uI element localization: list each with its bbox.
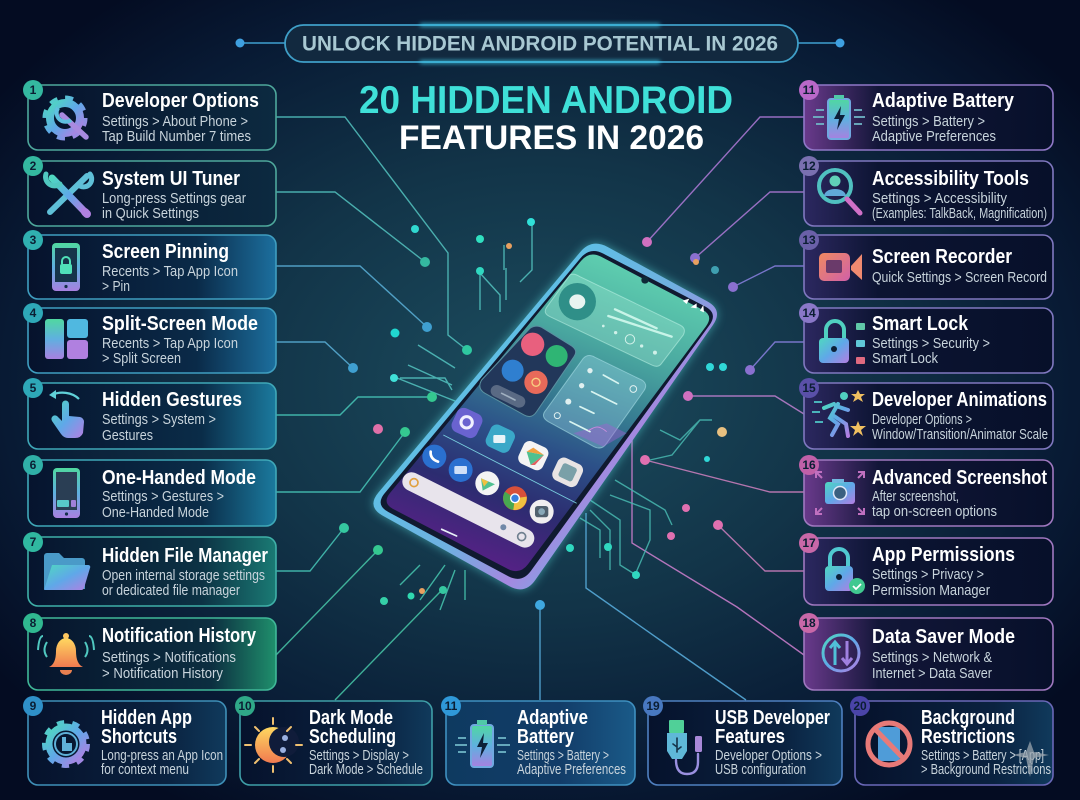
path text [309,748,423,778]
heading [101,707,192,748]
badge 5: 5 [30,381,37,395]
panel: card 6 One-Handed Mode [23,455,276,526]
icon: crossed wrenches [46,174,92,214]
path text: in Quick Settings [102,206,199,222]
path text [715,748,822,778]
path text: Developer Options > [872,412,972,428]
panel: card 15 Developer Animations [799,378,1053,449]
panel: card 18 Data Saver Mode [799,613,1053,690]
path text [102,412,216,444]
heading: Background [921,707,1015,729]
panel: card 11 Adaptive Battery right [799,80,1053,150]
icon: padlocks [819,321,865,364]
heading: USB Developer [715,707,830,729]
panel: card 10 Dark Mode Scheduling [235,696,432,785]
sparkle watermark [1013,741,1049,777]
icon: gear with hand [45,723,87,765]
path text: Internet > Data Saver [872,666,992,682]
badge 1 [23,80,43,100]
path text: > Notification History [102,666,224,682]
path text: One-Handed Mode [102,505,209,521]
badge 7: 7 [30,535,37,549]
badge 2: 2 [30,159,37,173]
badge 13: 13 [802,233,816,247]
badge 6 [23,455,43,475]
panel: card 14 Smart Lock [799,303,1053,373]
circuit lines right and bottom [400,117,804,700]
heading [309,707,396,748]
icon: up down arrows in circle [823,635,859,671]
widget: app folder [480,326,576,417]
path text [102,336,238,367]
heading: Hidden App [101,707,192,729]
badge 19: 19 [646,699,660,713]
badge 1: 1 [30,83,37,97]
panel: card 12 Accessibility Tools [799,156,1053,226]
path text [102,568,265,599]
widget: media player [545,274,684,366]
icon: sun and moon [245,718,302,772]
heading: Advanced Screenshot [872,467,1047,489]
path text: After screenshot, [872,489,959,505]
path text: Settings > About Phone > [102,114,248,130]
icon: battery [813,95,865,139]
badge 5 [23,378,43,398]
path text: tap on-screen options [872,504,997,520]
badge 20 [850,696,870,716]
badge 15: 15 [802,381,816,395]
panel: card 9 Hidden App Shortcuts [23,696,226,785]
path text: Settings > Notifications [102,650,236,666]
panel: card 7 Hidden File Manager [23,532,276,606]
icon: bell [38,633,94,675]
icon: prohibited phone [868,723,910,765]
badge 6: 6 [30,458,37,472]
path text: Settings > Security > [872,336,990,352]
panel: card 2 System UI Tuner [23,156,276,226]
widget: settings sliders [543,356,646,448]
heading: Adaptive Battery [872,90,1015,112]
panel: card 20 Background Restrictions [850,696,1053,785]
badge 8 [23,613,43,633]
heading: Battery [517,726,575,748]
path text [102,489,224,521]
title: 20 HIDDEN ANDROID [359,79,733,122]
banner [236,25,844,62]
badge 13 [799,230,819,250]
path text: Tap Build Number 7 times [102,129,251,145]
path text: Long-press Settings gear [102,191,246,207]
heading: Data Saver Mode [872,626,1015,648]
path text [102,191,246,222]
badge 2 [23,156,43,176]
path text: Open internal storage settings [102,568,265,584]
heading [715,707,830,748]
badge 14 [799,303,819,323]
circuit lines left [276,117,532,700]
icon: folder [44,553,90,590]
path text: Settings > Accessibility [872,191,1008,207]
heading: Developer Options [102,90,259,112]
path text: Dark Mode > Schedule [309,762,423,778]
panel: card 16 Advanced Screenshot [799,455,1053,526]
panel: card 13 Screen Recorder [799,230,1053,299]
icon: magnifier with person [819,170,860,213]
path text: Settings > Battery > [517,748,609,764]
heading: Scheduling [309,726,396,748]
heading: One-Handed Mode [102,467,256,489]
path text: Adaptive Preferences [872,129,996,145]
path text [872,489,997,520]
path text: for context menu [101,762,189,778]
path text [872,650,992,682]
path text: Recents > Tap App Icon [102,336,238,352]
badge 18 [799,613,819,633]
path text [872,412,1048,443]
path text: Settings > System > [102,412,216,428]
badge 18: 18 [802,616,816,630]
icon: runner and stars [812,390,866,436]
heading: Screen Pinning [102,241,229,263]
badge 17: 17 [802,536,816,550]
icon: video camera [819,253,862,281]
path text: Settings > Network & [872,650,992,666]
path text [101,748,223,778]
icon: battery [455,720,510,767]
panel: card 17 App Permissions [799,533,1053,605]
phone [373,244,717,589]
badge 3 [23,230,43,250]
badge 17 [799,533,819,553]
path text [517,748,626,778]
badge 19 [643,696,663,716]
heading: Dark Mode [309,707,393,729]
path text: > Pin [102,279,130,295]
path text: or dedicated file manager [102,583,240,599]
icon: lock with check [825,549,865,594]
path text: Settings > Display > [309,748,409,764]
panel: card 5 Hidden Gestures [23,378,276,449]
badge 11: 11 [445,699,458,713]
badge 3: 3 [30,233,37,247]
heading: Developer Animations [872,389,1047,411]
badge 9: 9 [30,699,37,713]
heading: App Permissions [872,544,1015,566]
path text [872,336,990,367]
badge 11 [799,80,819,100]
title: FEATURES IN 2026 [399,119,704,157]
badge 4 [23,303,43,323]
path text [102,114,251,145]
search bar [410,479,526,541]
path text [872,191,1047,222]
panel: card 3 Screen Pinning [23,230,276,299]
badge 9 [23,696,43,716]
path text: Recents > Tap App Icon [102,264,238,280]
icon: one-handed phone [53,468,80,518]
path text [872,567,990,599]
badge 16 [799,455,819,475]
heading: System UI Tuner [102,168,240,190]
path text: Smart Lock [872,351,939,367]
badge 11: 11 [803,83,816,97]
panel: card 8 Notification History [23,613,276,690]
path text: Long-press an App Icon [101,748,223,764]
badge 10 [235,696,255,716]
heading [517,707,588,748]
circuit nodes [339,218,755,610]
panel: card 1 Developer Options [23,80,276,150]
panel: card 19 USB Developer Features [643,696,842,785]
title [359,79,733,157]
path text: USB configuration [715,762,806,778]
icon: gear and wrench [45,98,86,138]
heading: Split-Screen Mode [102,313,258,335]
app icons [422,405,585,524]
heading: Accessibility Tools [872,168,1029,190]
path text [872,114,996,145]
icon: swiping hand [49,390,84,438]
panel: card 4 Split-Screen Mode [23,303,276,373]
heading: Smart Lock [872,313,969,335]
path text: Settings > Battery > [872,114,985,130]
icon: camera with arrows [816,472,864,514]
icon: phone with lock [52,243,80,291]
icon: USB cable [667,720,702,774]
heading: Hidden Gestures [102,389,242,411]
path text: Settings > Gestures > [102,489,224,505]
heading: Hidden File Manager [102,545,268,567]
badge 15 [799,378,819,398]
heading: Restrictions [921,726,1015,748]
badge 4: 4 [30,306,37,320]
path text: Developer Options > [715,748,822,764]
path text: > Split Screen [102,351,181,367]
path text [921,748,1051,778]
badge 8: 8 [30,616,37,630]
path text: Permission Manager [872,583,990,599]
path text [102,650,236,682]
path text [102,264,238,295]
heading: Screen Recorder [872,246,1012,268]
panel: card 11 Adaptive Battery bottom [441,696,635,785]
badge 12 [799,156,819,176]
heading [921,707,1015,748]
badge 12: 12 [802,159,816,173]
badge 20: 20 [853,699,867,713]
heading: Shortcuts [101,726,177,748]
badge 14: 14 [802,306,816,320]
path text: Quick Settings > Screen Record [872,270,1047,286]
badge 7 [23,532,43,552]
heading: Adaptive [517,707,588,729]
badge 11 [441,696,461,716]
path text: Settings > Privacy > [872,567,984,583]
path text: Gestures [102,428,153,444]
heading: Notification History [102,625,257,647]
badge 16: 16 [802,458,816,472]
path text: Adaptive Preferences [517,762,626,778]
banner: UNLOCK HIDDEN ANDROID POTENTIAL IN 2026 [302,32,778,56]
badge 10: 10 [238,699,252,713]
icon: split panes [45,319,88,359]
heading: Features [715,726,785,748]
